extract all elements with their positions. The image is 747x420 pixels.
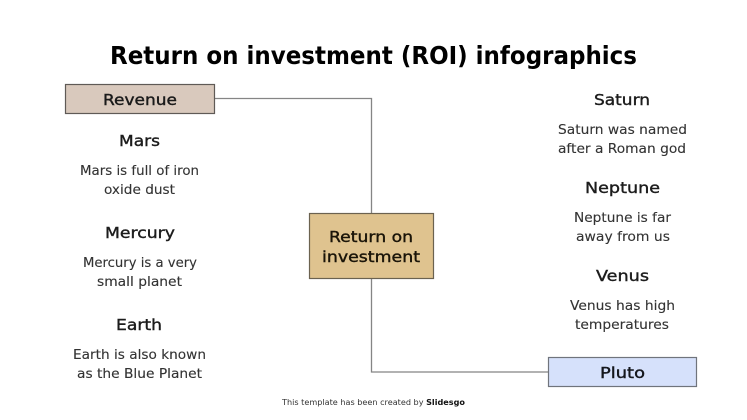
text block: Mars: oxide dust [104,183,175,198]
text block: Earth: Earth is also known [73,348,206,363]
arrow: revenue to return on investment connector [215,98,372,213]
text block: Saturn: Saturn [594,91,650,109]
title: Return on investment (ROI) infographics [110,41,637,70]
text block: Neptune: away from us [576,230,670,245]
text block: Neptune [574,179,672,245]
panel: return on investment box: Return on [329,228,413,246]
footer credit: This template has been created by Slidesgo [281,398,465,407]
text block: Mars: Mars [119,132,160,150]
arrow: return on investment to pluto connector [372,279,548,372]
panel: revenue label: Revenue [103,91,177,109]
text block: Mars: Mars is full of iron [80,164,199,179]
text block: Venus: temperatures [575,318,669,333]
text block: Mercury: small planet [97,275,182,290]
panel: right column [558,91,687,333]
panel: pluto label: Pluto [600,364,645,382]
text block: Mercury: Mercury is a very [83,256,197,271]
text block: Earth: Earth [116,316,162,334]
panel: left column [73,132,206,382]
panel: return on investment box [310,214,434,278]
text block: Earth [73,316,206,382]
text block: Venus: Venus [596,267,649,285]
panel: return on investment box: investment [322,248,420,266]
text block: Saturn: Saturn was named [558,123,687,138]
text block: Mars [80,132,199,198]
text block: Mercury: Mercury [105,224,175,242]
text block: Earth: as the Blue Planet [77,367,202,382]
text block: Neptune: Neptune is far [574,211,672,226]
text block: Venus: Venus has high [570,299,675,314]
text block: Saturn: after a Roman god [558,142,686,157]
text block: Saturn [558,91,687,157]
text block: Mercury [83,224,197,290]
panel: revenue label [66,84,214,114]
text block: Neptune: Neptune [585,179,660,197]
panel: pluto label [548,358,696,386]
text block: Venus [570,267,675,333]
